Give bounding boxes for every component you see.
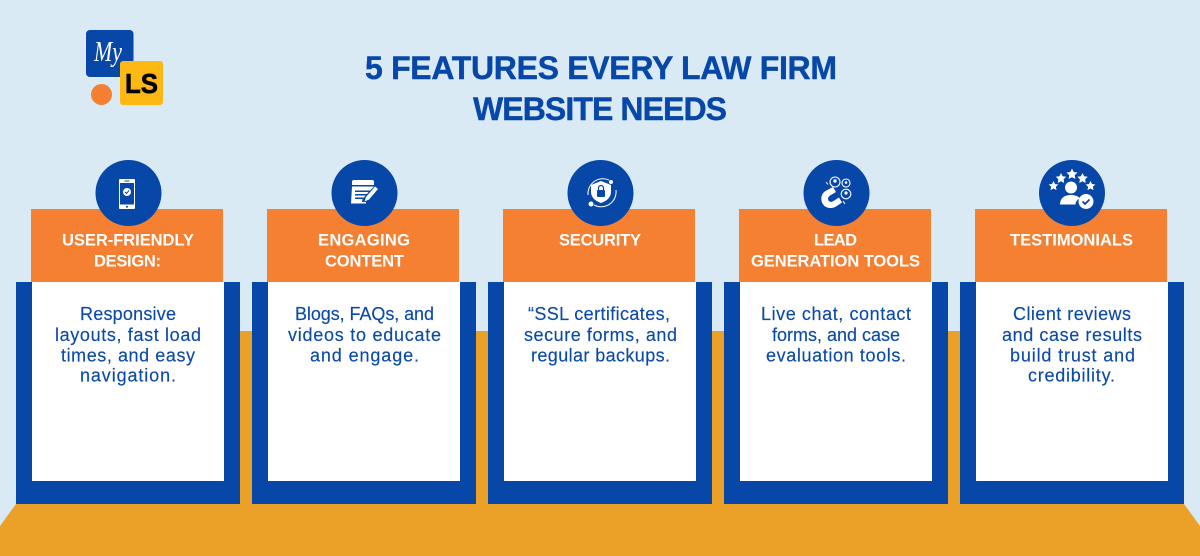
body text: Live chat, contact xyxy=(761,304,911,324)
heading: TESTIMONIALS xyxy=(1010,232,1133,250)
body text: “SSL certificates, xyxy=(528,304,670,324)
heading xyxy=(751,232,920,270)
heading xyxy=(62,232,194,270)
heading: SECURITY xyxy=(559,232,641,250)
heading: DESIGN: xyxy=(94,252,161,270)
body text: regular backups. xyxy=(531,346,670,366)
body text: Client reviews xyxy=(1013,304,1131,324)
body text: navigation. xyxy=(80,366,176,386)
title: WEBSITE NEEDS xyxy=(473,91,727,127)
heading: GENERATION TOOLS xyxy=(751,252,920,270)
body text: evaluation tools. xyxy=(766,346,906,366)
heading: LEAD xyxy=(814,232,857,250)
body text xyxy=(524,304,677,366)
panel: testimonials xyxy=(960,160,1184,504)
body text: credibility. xyxy=(1028,366,1115,386)
heading: ENGAGING xyxy=(318,232,410,250)
panel: engaging content xyxy=(252,160,476,504)
icon: smartphone xyxy=(119,179,135,209)
body text: Responsive xyxy=(80,304,176,324)
body text: Blogs, FAQs, and xyxy=(295,304,434,324)
logo: My xyxy=(93,36,122,68)
panel: lead generation tools xyxy=(724,160,948,504)
body text: build trust and xyxy=(1010,346,1135,366)
body text: videos to educate xyxy=(288,325,441,345)
logo: LS xyxy=(125,68,158,99)
heading xyxy=(318,232,410,270)
title: 5 FEATURES EVERY LAW FIRM xyxy=(365,50,837,86)
body text xyxy=(55,304,201,386)
icon: stars and reviewer xyxy=(1049,168,1095,209)
panel: user-friendly design xyxy=(16,160,240,504)
logo xyxy=(86,30,163,105)
floor platform xyxy=(0,331,1200,556)
body text: layouts, fast load xyxy=(55,325,201,345)
body text: secure forms, and xyxy=(524,325,677,345)
title xyxy=(365,50,837,127)
heading: CONTENT xyxy=(325,252,404,270)
icon: magnet attracting people xyxy=(821,177,851,208)
body text: forms, and case xyxy=(772,325,900,345)
body text: and case results xyxy=(1002,325,1142,345)
panel: security xyxy=(488,160,712,504)
body text: and engage. xyxy=(310,346,419,366)
body text xyxy=(1002,304,1142,386)
heading: USER-FRIENDLY xyxy=(62,232,194,250)
icon: shield with padlock xyxy=(588,179,616,207)
body text xyxy=(288,304,441,366)
icon: notepad and pen xyxy=(351,180,378,204)
body text xyxy=(761,304,911,366)
body text: times, and easy xyxy=(61,346,195,366)
